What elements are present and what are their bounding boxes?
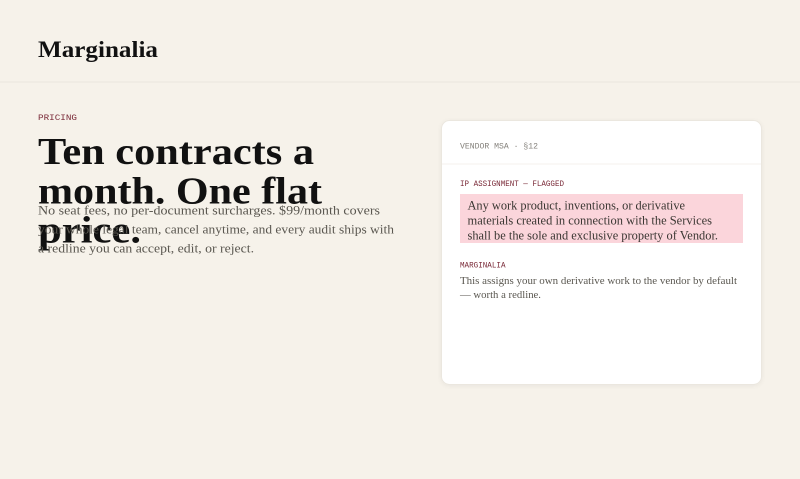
marginalia note: — worth a redline. <box>459 289 541 301</box>
highlighted clause <box>460 194 743 243</box>
marginalia label: MARGINALIA <box>460 262 506 270</box>
main heading: month. One flat <box>38 170 322 212</box>
clause text: materials created in connection with the Services <box>468 214 712 228</box>
marginalia note <box>459 275 737 301</box>
main heading: Ten contracts a <box>38 131 314 173</box>
eyebrow label: PRICING <box>38 113 77 123</box>
card background <box>442 120 762 384</box>
main heading: price. <box>38 210 141 252</box>
card header label: VENDOR MSA · §12 <box>460 142 538 152</box>
card header divider <box>442 164 761 165</box>
panel: contract card <box>442 120 762 384</box>
clause highlight <box>460 194 743 243</box>
flag label: IP ASSIGNMENT — FLAGGED <box>460 180 564 189</box>
body paragraph: No seat fees, no per-document surcharges. $99/month covers <box>38 202 380 218</box>
clause text: Any work product, inventions, or derivative <box>468 198 685 212</box>
header divider bar <box>0 82 800 83</box>
body paragraph: a redline you can accept, edit, or reject. <box>38 240 254 256</box>
marginalia note: This assigns your own derivative work to the vendor by default <box>460 275 737 287</box>
brand name: Marginalia <box>38 37 159 62</box>
body paragraph: your whole legal team, cancel anytime, and every audit ships with <box>38 222 395 236</box>
main heading <box>38 131 322 252</box>
clause text: shall be the sole and exclusive property of Vendor. <box>468 228 718 242</box>
clause text <box>468 198 718 242</box>
body paragraph <box>38 202 395 256</box>
